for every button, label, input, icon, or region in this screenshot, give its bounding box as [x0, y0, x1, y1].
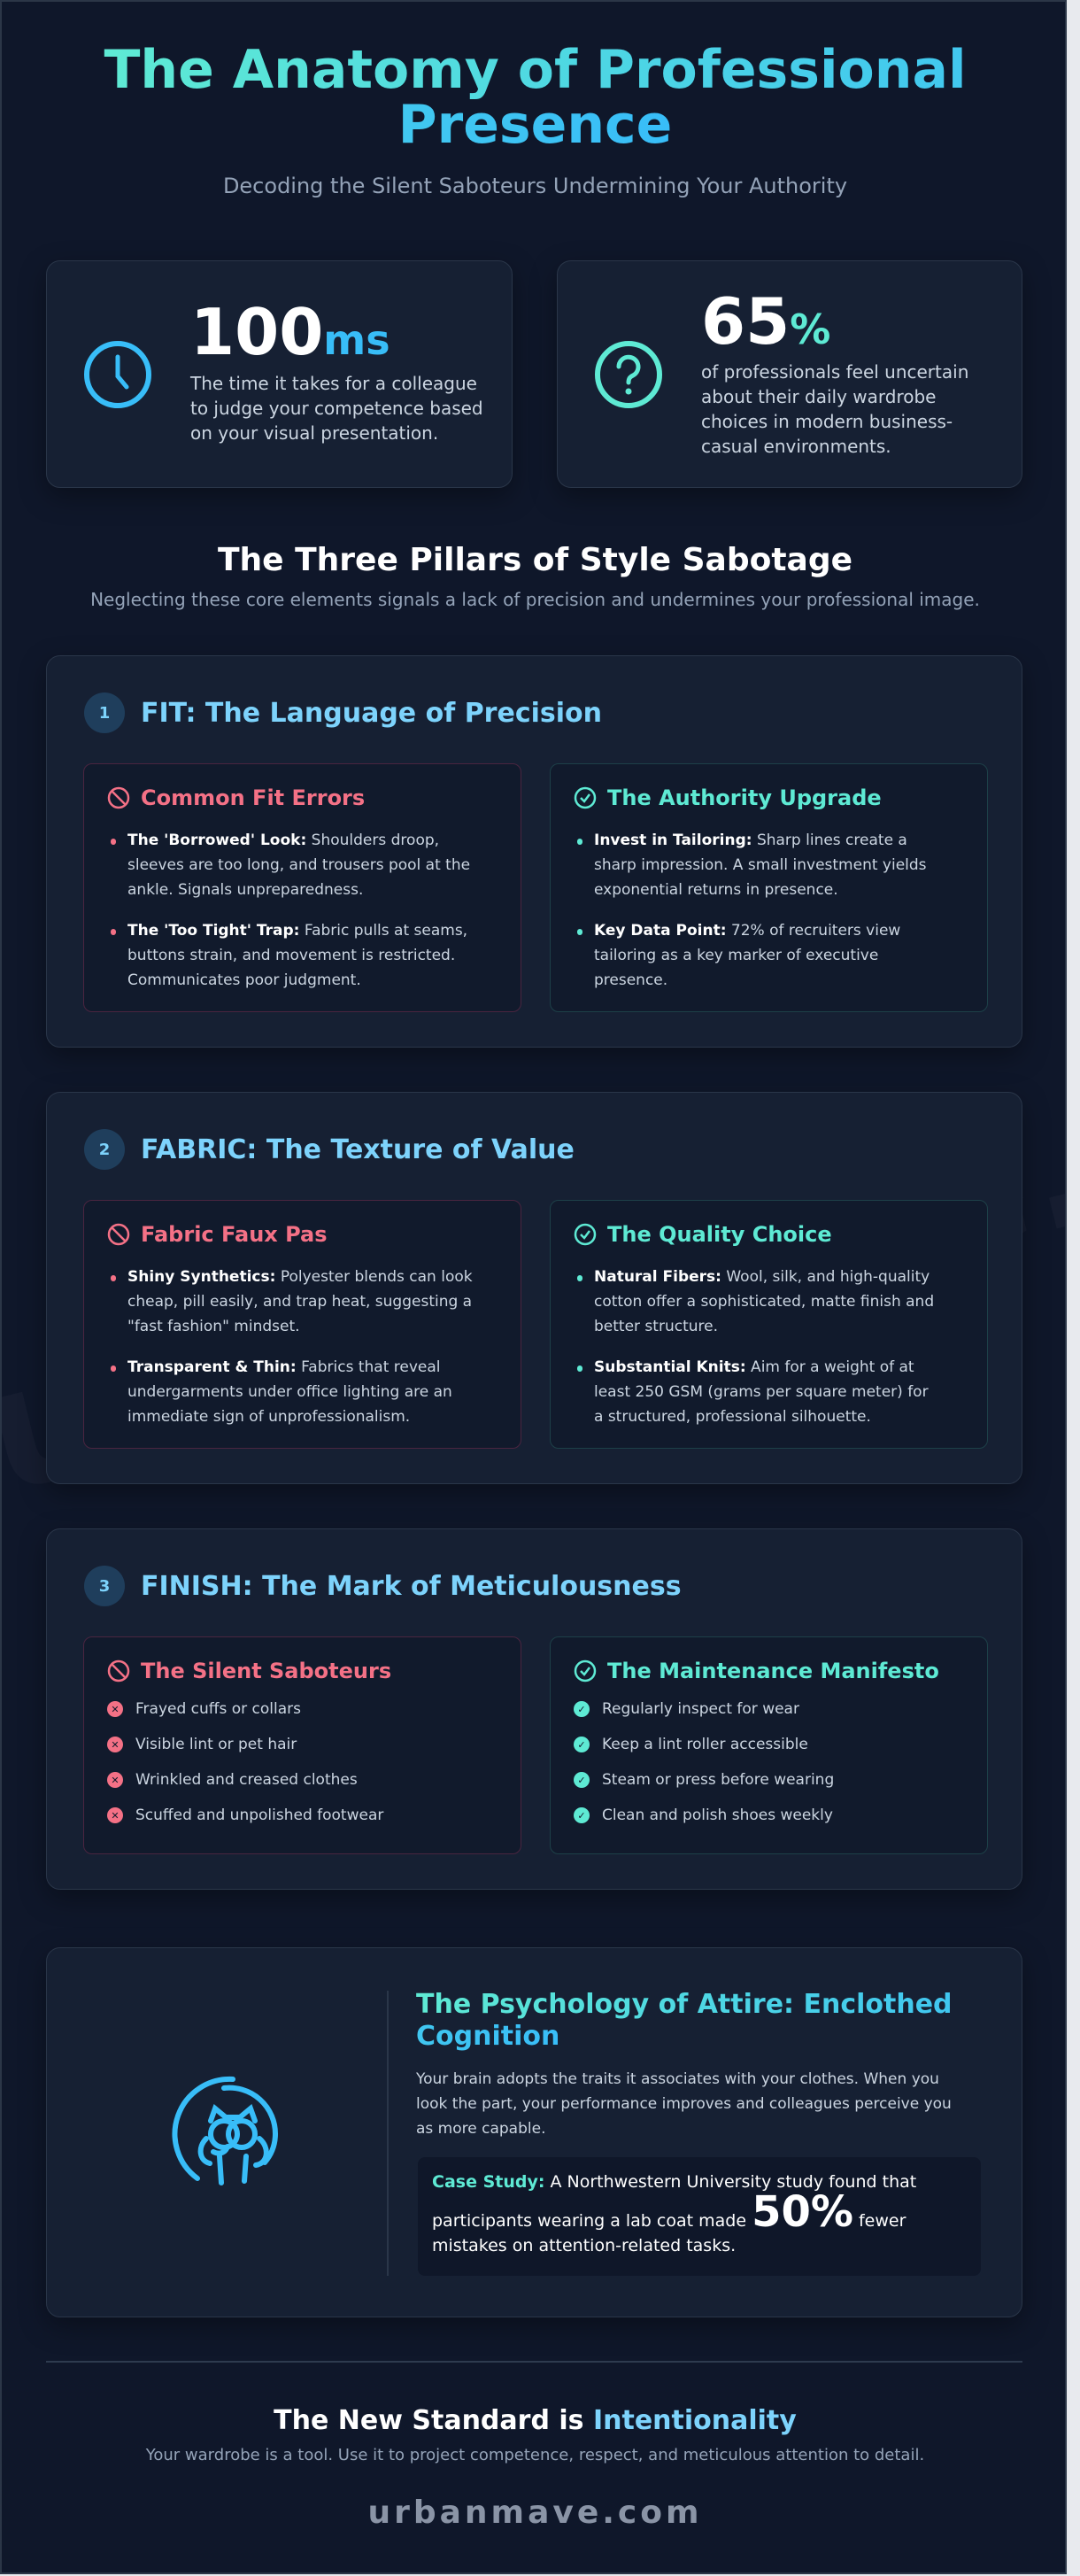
box: silent saboteurs: Scuffed and unpolished footwear — [135, 1806, 383, 1824]
box: silent saboteurs: Frayed cuffs or collars — [135, 1700, 301, 1718]
stat card: 65% — [557, 260, 1022, 488]
brand: urbanmave.com — [367, 2495, 703, 2531]
pillar heading: 1 — [99, 703, 110, 723]
psychology title: The Psychology of Attire: Enclothed — [416, 1989, 953, 2020]
pillar heading — [84, 1129, 575, 1170]
box: fabric faux pas: Fabric Faux Pas — [141, 1222, 328, 1247]
divider — [46, 2361, 1022, 2363]
stat number: 65% — [701, 284, 830, 359]
title: Presence — [398, 94, 672, 156]
box: authority upgrade — [550, 763, 988, 1012]
box: maintenance manifesto: ✓ — [577, 1739, 586, 1750]
icon: question — [595, 341, 662, 408]
pillar heading: 2 — [99, 1141, 110, 1158]
panel: finish — [46, 1528, 1022, 1890]
psychology title — [416, 1989, 953, 2052]
box: fabric faux pas — [83, 1200, 521, 1449]
box: common fit errors: The 'Too Tight' Trap: Fabric pulls at seams, buttons strain, and movement is restricted. Communicates poor judgment. — [127, 922, 467, 989]
box: maintenance manifesto: The Maintenance Manifesto — [607, 1659, 939, 1683]
divider line — [387, 1991, 389, 2276]
box: silent saboteurs: ✕ — [111, 1704, 120, 1714]
box: silent saboteurs: Wrinkled and creased clothes — [135, 1771, 358, 1789]
case study callout — [418, 2157, 981, 2276]
box: authority upgrade: The Authority Upgrade — [607, 785, 882, 810]
pillar heading: FABRIC: The Texture of Value — [141, 1133, 575, 1165]
box: fabric faux pas: Transparent & Thin: Fabrics that reveal undergarments under office lighting are an immediate sign of unprofessionalism. — [127, 1358, 452, 1426]
psychology text: Your brain adopts the traits it associates with your clothes. When you look the part, your performance improves and colleagues perceive you as more capable. — [416, 2070, 952, 2138]
case study callout: Case Study: A Northwestern University study found that participants wearing a lab coat made 50% fewer mistakes on attention-related tasks. — [432, 2172, 916, 2255]
box: silent saboteurs: The Silent Saboteurs — [141, 1659, 391, 1683]
footer heading: The New Standard is Intentionality — [274, 2405, 797, 2436]
panel: fabric — [46, 1092, 1022, 1484]
panel: fit — [46, 655, 1022, 1048]
box: silent saboteurs: ✕ — [111, 1810, 120, 1821]
box: maintenance manifesto: Keep a lint roller accessible — [602, 1736, 808, 1753]
box: maintenance manifesto — [550, 1636, 988, 1854]
subtitle: Decoding the Silent Saboteurs Undermining Your Authority — [223, 174, 847, 198]
panel: psychology — [46, 1947, 1022, 2317]
box: maintenance manifesto: Clean and polish shoes weekly — [602, 1806, 833, 1824]
psychology title: Cognition — [416, 2021, 559, 2052]
pillar heading: 3 — [99, 1576, 110, 1596]
footer text: Your wardrobe is a tool. Use it to project competence, respect, and meticulous attention to detail. — [146, 2446, 924, 2464]
box: maintenance manifesto: Regularly inspect for wear — [602, 1700, 799, 1718]
pillar heading: FINISH: The Mark of Meticulousness — [141, 1571, 682, 1601]
box: quality choice: Substantial Knits: Aim for a weight of at least 250 GSM (grams per square meter) for a structured, professional silhouette. — [594, 1358, 929, 1426]
title — [104, 39, 967, 156]
box: common fit errors — [83, 763, 521, 1012]
box: authority upgrade: Key Data Point: 72% of recruiters view tailoring as a key marker of executive presence. — [594, 922, 900, 989]
box: quality choice — [550, 1200, 988, 1449]
stat number: 100ms — [190, 295, 390, 369]
stat text: The time it takes for a colleague to judge your competence based on your visual presentation. — [190, 373, 483, 444]
section subheading: Neglecting these core elements signals a lack of precision and undermines your professional image. — [90, 589, 980, 610]
box: quality choice: Natural Fibers: Wool, silk, and high-quality cotton offer a sophisticated, matte finish and better structure. — [594, 1268, 934, 1335]
title: The Anatomy of Professional — [104, 39, 967, 101]
stat card: 100ms — [46, 260, 513, 488]
icon: clock — [84, 341, 151, 408]
pillar heading — [84, 1566, 682, 1606]
box: silent saboteurs: ✕ — [111, 1775, 120, 1785]
box: silent saboteurs: Visible lint or pet hair — [135, 1736, 297, 1753]
pillar heading — [84, 692, 602, 733]
box: silent saboteurs — [83, 1636, 521, 1854]
stat text: of professionals feel uncertain about their daily wardrobe choices in modern business-casual environments. — [701, 361, 968, 457]
icon: brain — [172, 2076, 278, 2185]
box: maintenance manifesto: ✓ — [577, 1704, 586, 1714]
section heading: The Three Pillars of Style Sabotage — [218, 542, 852, 578]
box: silent saboteurs: ✕ — [111, 1739, 120, 1750]
box: maintenance manifesto: ✓ — [577, 1810, 586, 1821]
box: common fit errors: Common Fit Errors — [141, 785, 365, 810]
box: authority upgrade: Invest in Tailoring: Sharp lines create a sharp impression. A small investment yields exponential returns in presence. — [594, 832, 927, 899]
box: maintenance manifesto: ✓ — [577, 1775, 586, 1785]
box: maintenance manifesto: Steam or press before wearing — [602, 1771, 834, 1789]
pillar heading: FIT: The Language of Precision — [141, 698, 602, 728]
box: common fit errors: The 'Borrowed' Look: Shoulders droop, sleeves are too long, and trousers pool at the ankle. Signals unpreparedness. — [127, 832, 470, 899]
box: quality choice: The Quality Choice — [607, 1222, 832, 1247]
box: fabric faux pas: Shiny Synthetics: Polyester blends can look cheap, pill easily, and trap heat, suggesting a "fast fashion" mindset. — [127, 1268, 473, 1335]
